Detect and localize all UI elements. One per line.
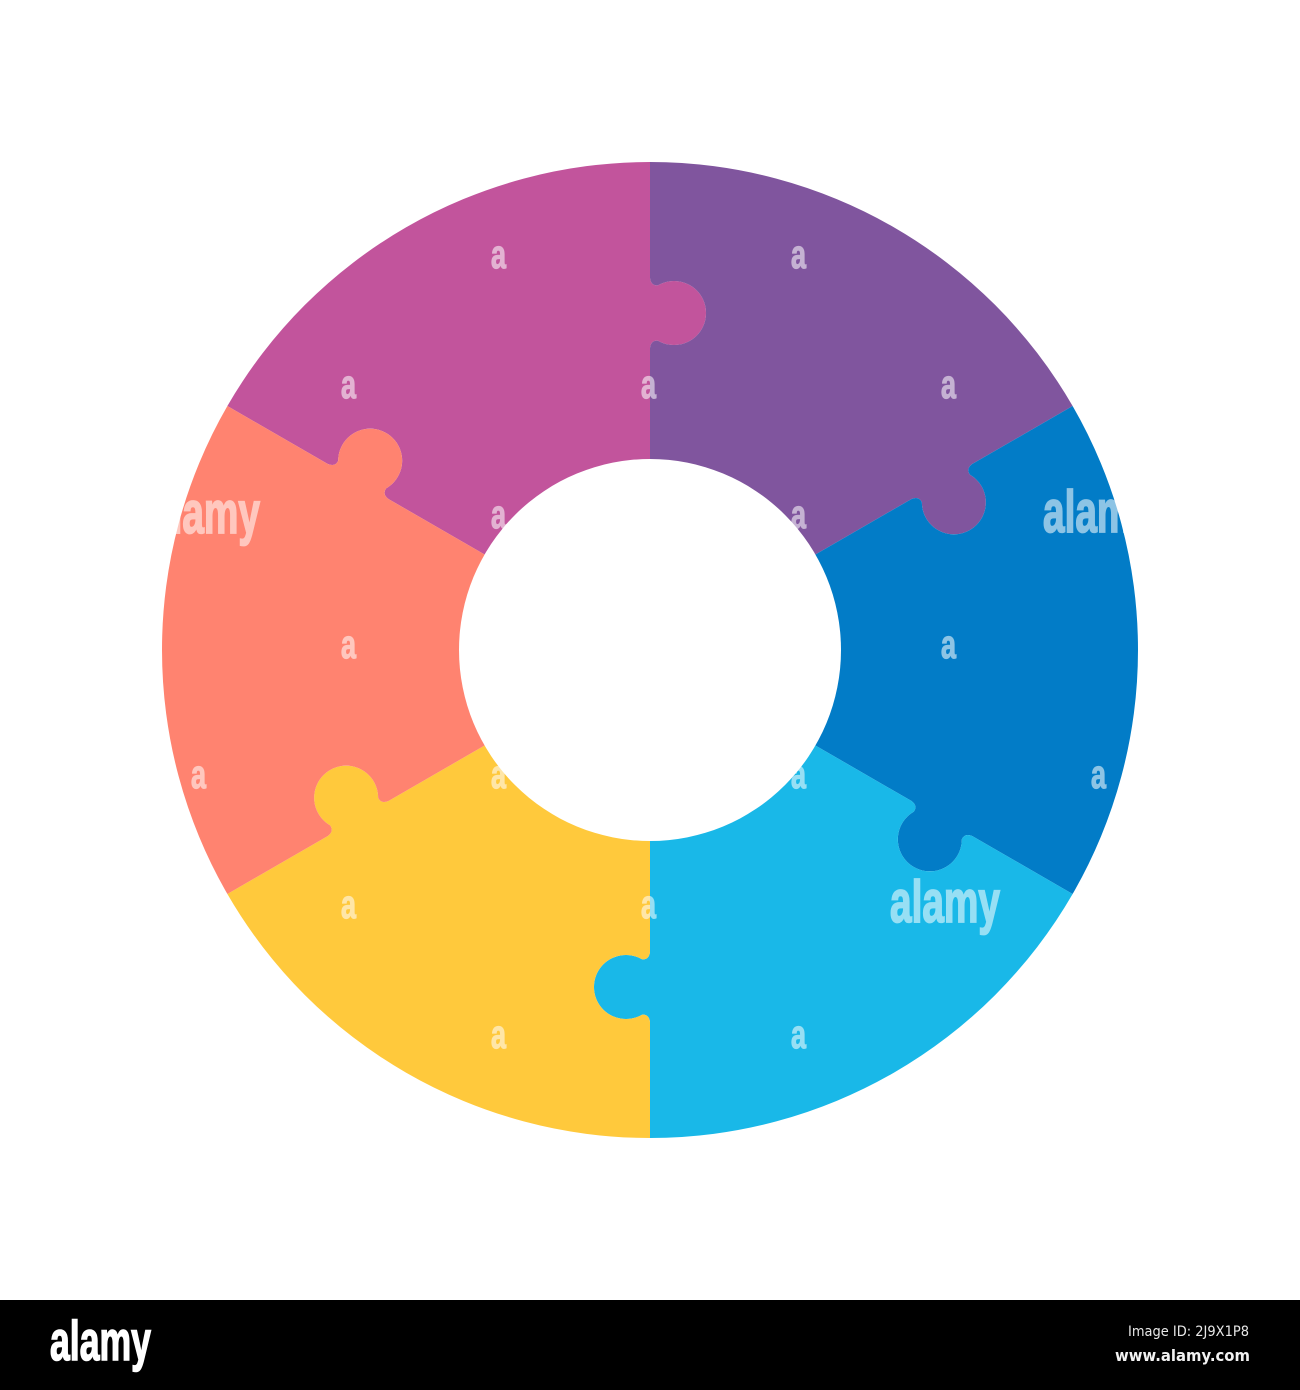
- piece: yellow: [199, 649, 779, 1260]
- watermarks over the ring: a: [791, 233, 807, 277]
- watermarks over the ring: a: [791, 493, 807, 537]
- watermarks over the ring: alamy: [150, 480, 260, 546]
- piece: sky blue: [594, 745, 1073, 1138]
- watermarks over the ring: a: [941, 363, 957, 407]
- watermarks over the ring: a: [491, 1013, 507, 1057]
- watermarks over the ring: a: [491, 493, 507, 537]
- piece: magenta: [227, 162, 706, 555]
- watermarks over the ring: a: [791, 753, 807, 797]
- piece: coral: [16, 357, 596, 968]
- image id: Image ID: 2J9X1P8: [1128, 1324, 1249, 1340]
- watermarks over the ring: alamy: [1043, 479, 1153, 545]
- watermarks over the ring: a: [341, 623, 357, 667]
- watermarks over the ring: a: [641, 363, 657, 407]
- piece: purple: [521, 40, 1101, 651]
- watermarks over the ring: a: [1091, 753, 1107, 797]
- footer logo: alamy: [50, 1309, 151, 1372]
- watermarks over the ring: a: [941, 623, 957, 667]
- watermarks over the ring: a: [341, 883, 357, 927]
- watermarks over the ring: a: [491, 753, 507, 797]
- piece: blue: [704, 332, 1284, 943]
- watermarks over the ring: a: [791, 1013, 807, 1057]
- watermarks over the ring: a: [491, 233, 507, 277]
- watermarks over the ring: a: [341, 363, 357, 407]
- watermarks over the ring: alamy: [890, 869, 1000, 935]
- watermarks over the ring: a: [641, 883, 657, 927]
- footer bar: [0, 1300, 1300, 1390]
- watermarks over the ring: [150, 233, 1153, 1057]
- watermarks over the ring: a: [191, 753, 207, 797]
- website: www.alamy.com: [1115, 1346, 1250, 1365]
- centre hole: [459, 459, 841, 841]
